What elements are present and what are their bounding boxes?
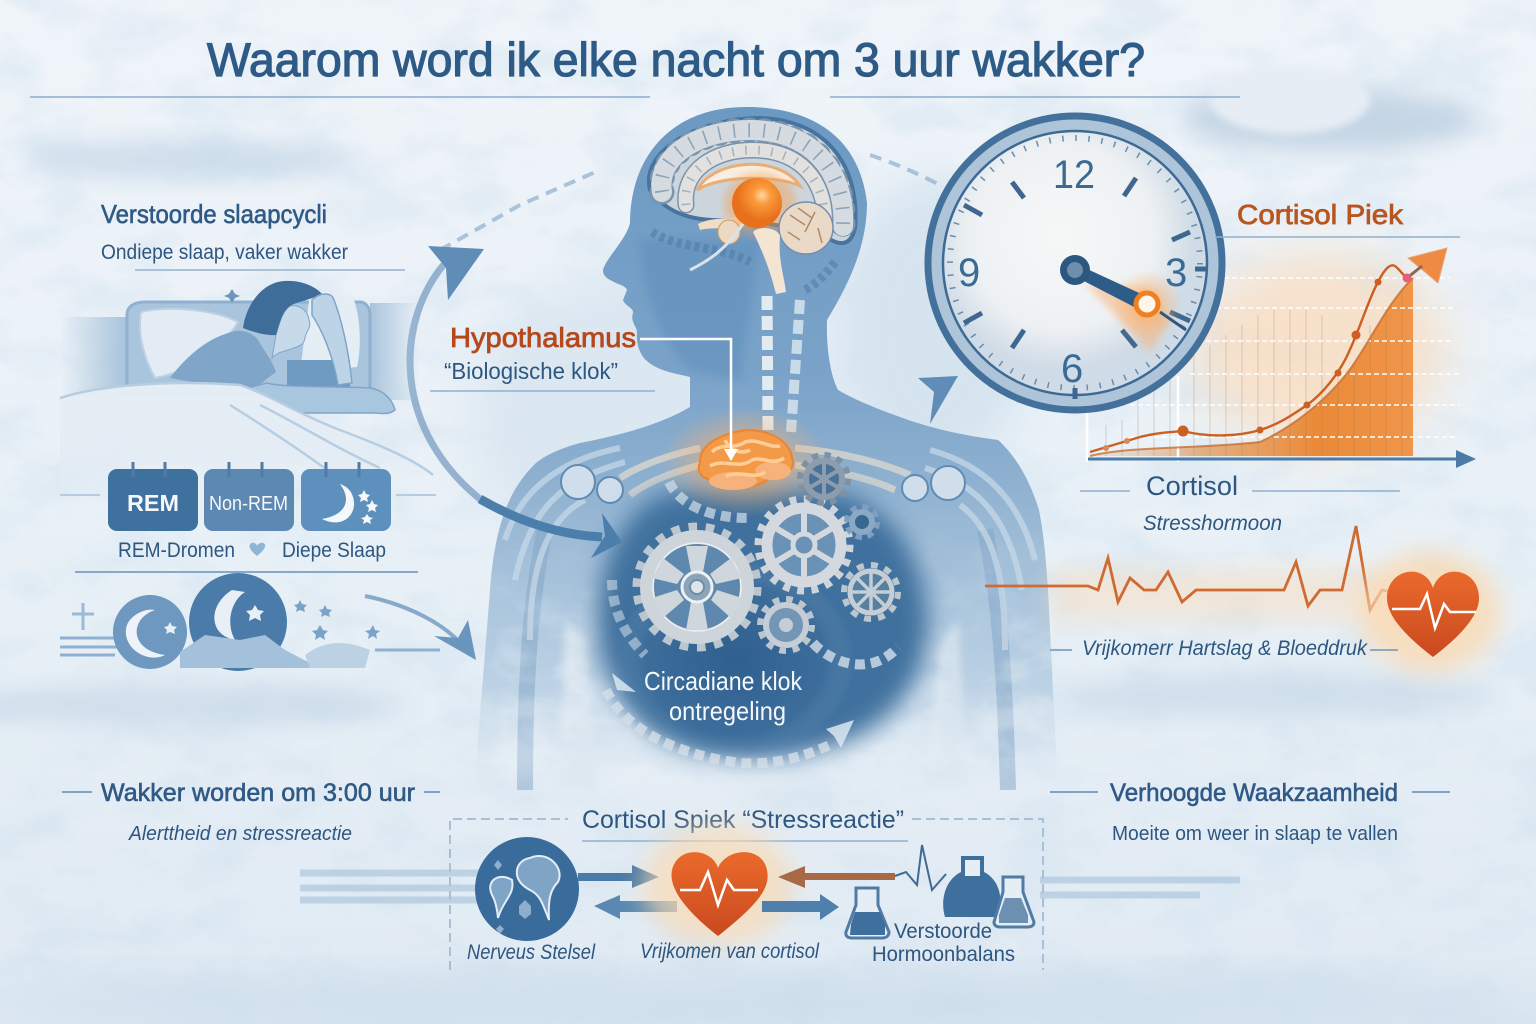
clock numerals: 3 bbox=[1165, 251, 1187, 295]
bed side bands bbox=[60, 303, 420, 400]
icon: REM calendar bbox=[108, 462, 198, 531]
icon: hypothalamus organ bbox=[660, 407, 830, 517]
panel: human silhouette bbox=[410, 107, 1070, 800]
body interior bbox=[470, 240, 1070, 800]
label: cortisol release: Vrijkomen van cortisol bbox=[640, 940, 820, 963]
label: hypothalamus: Hypothalamus bbox=[450, 322, 636, 353]
icon: moon calendar bbox=[301, 462, 391, 531]
icon: REM calendar: REM bbox=[127, 490, 179, 516]
label: nervous system: Nerveus Stelsel bbox=[467, 941, 596, 964]
rules bbox=[62, 791, 440, 793]
icon: moons and stars bbox=[60, 573, 440, 671]
lower arm bbox=[247, 383, 395, 414]
panel: heightened alertness bbox=[1050, 779, 1450, 845]
spine bbox=[767, 296, 768, 432]
chart: cortisol curve bbox=[1087, 248, 1476, 468]
cerebellum bbox=[779, 202, 833, 254]
arrows: top row bbox=[578, 865, 659, 888]
icon: small heart bbox=[249, 543, 265, 556]
raised arm bbox=[312, 294, 352, 385]
title rule bbox=[30, 96, 1240, 98]
sparkle bbox=[224, 289, 240, 303]
clock numerals: 6 bbox=[1061, 347, 1083, 391]
heading: cortisol peak: Cortisol Piek bbox=[1237, 199, 1404, 230]
small gear right bbox=[847, 507, 877, 537]
medium gear bbox=[759, 500, 849, 590]
arm strips bbox=[525, 530, 1008, 790]
icon: brain bbox=[649, 118, 856, 294]
label: cortisol bbox=[1080, 471, 1400, 535]
rule bbox=[75, 571, 418, 573]
icon: nervous system bbox=[475, 837, 579, 941]
thalamus orb bbox=[732, 178, 782, 228]
arrow: large circular guide bbox=[428, 246, 958, 558]
panel: disturbed sleep cycles bbox=[60, 199, 476, 671]
panel: waking at 3 bbox=[62, 779, 440, 845]
minute ticks bbox=[950, 138, 1200, 388]
large gear bbox=[638, 528, 756, 646]
dashed guide arcs bbox=[410, 155, 940, 503]
hypothalamus leader arrow bbox=[640, 339, 738, 461]
headboard bbox=[127, 302, 370, 395]
blanket edge and folds bbox=[60, 383, 433, 475]
cortex folds bbox=[661, 130, 843, 226]
title: Waarom word ik elke nacht om 3 uur wakker? bbox=[207, 33, 1145, 86]
heading: Verhoogde Waakzaamheid bbox=[1110, 779, 1398, 807]
subtext: Moeite om weer in slaap te vallen bbox=[1112, 823, 1398, 845]
label: circadian clock: Circadiane klok bbox=[644, 666, 803, 696]
label: hypothalamus: “Biologische klok” bbox=[444, 358, 618, 384]
chart: heartbeat line bbox=[985, 526, 1392, 620]
heading: disturbed sleep: Verstoorde slaapcycli bbox=[101, 199, 327, 229]
panel: cortisol spike bbox=[300, 806, 1240, 970]
gear right lower bbox=[844, 565, 898, 619]
glow bbox=[643, 825, 793, 945]
pillows bbox=[140, 293, 360, 388]
chart grid bbox=[1106, 290, 1402, 456]
hair bbox=[243, 281, 322, 335]
label: circadian clock bbox=[644, 666, 803, 726]
arrow: right bbox=[762, 894, 839, 920]
rule bbox=[582, 840, 908, 842]
icon: person in bed bbox=[60, 281, 433, 490]
arm and torso gaps bbox=[562, 622, 964, 730]
icon: heart centre bbox=[672, 852, 768, 936]
blanket bbox=[60, 383, 433, 490]
label: hormone balance: Verstoorde bbox=[894, 920, 992, 943]
label: hypothalamus bbox=[430, 322, 655, 391]
clock numerals: 9 bbox=[958, 251, 980, 295]
icon: flasks bbox=[846, 856, 1034, 938]
label: dreams: REM-Dromen bbox=[118, 539, 235, 562]
subtext: Alerttheid en stressreactie bbox=[128, 823, 352, 845]
clock glow wedge bbox=[1085, 283, 1170, 352]
chest cavity bbox=[598, 488, 928, 758]
icon: Non-REM calendar: Non-REM bbox=[209, 493, 288, 515]
shoulder joints bbox=[561, 465, 965, 503]
label: hormone balance: Hormoonbalans bbox=[872, 943, 1015, 966]
arrow: orange bbox=[778, 845, 946, 890]
body bbox=[474, 107, 1058, 790]
chart lines bbox=[1090, 265, 1407, 452]
chart axis bbox=[1088, 458, 1462, 460]
gear lower bbox=[760, 599, 812, 651]
halftone below brain bbox=[652, 232, 835, 290]
clock numerals bbox=[958, 153, 1187, 391]
beaded arcs bbox=[606, 482, 898, 763]
heading: Cortisol Spiek “Stressreactie” bbox=[582, 806, 904, 834]
mottled lower body bbox=[482, 583, 1054, 780]
label: cortisol: Cortisol bbox=[1146, 471, 1238, 501]
clock hour ticks bbox=[964, 178, 1207, 399]
face bbox=[272, 306, 310, 358]
arrow: lower left bbox=[365, 596, 476, 660]
subheading: Ondiepe slaap, vaker wakker bbox=[101, 241, 348, 264]
rule bbox=[135, 269, 405, 271]
text: heart rate: Vrijkomerr Hartslag & Bloeddruk bbox=[1082, 637, 1368, 660]
icon: Non-REM calendar bbox=[204, 462, 294, 531]
arrow: lower body loop bbox=[612, 673, 854, 748]
brainstem bbox=[753, 228, 786, 294]
small gear top bbox=[800, 455, 848, 503]
label: deep sleep: Diepe Slaap bbox=[282, 539, 386, 562]
label: circadian clock: ontregeling bbox=[669, 696, 786, 726]
rules bbox=[1050, 791, 1450, 793]
shirt bbox=[170, 331, 276, 392]
icon: clock bbox=[928, 116, 1222, 410]
icon: heart right bbox=[1360, 552, 1500, 672]
chart arrowhead bbox=[1408, 248, 1447, 283]
heading: Wakker worden om 3:00 uur bbox=[101, 779, 415, 807]
icon: gears bbox=[638, 455, 898, 651]
arrow: back bbox=[594, 895, 677, 919]
clock hands bbox=[1072, 262, 1150, 311]
label: cortisol: Stresshormoon bbox=[1143, 512, 1282, 535]
clock numerals: 12 bbox=[1053, 153, 1095, 197]
label: hormone balance bbox=[872, 920, 1015, 966]
dashed frame bbox=[450, 819, 1043, 970]
side bands bbox=[300, 873, 1240, 900]
corpus callosum bbox=[697, 164, 800, 190]
shoulder bands bbox=[505, 448, 1035, 650]
